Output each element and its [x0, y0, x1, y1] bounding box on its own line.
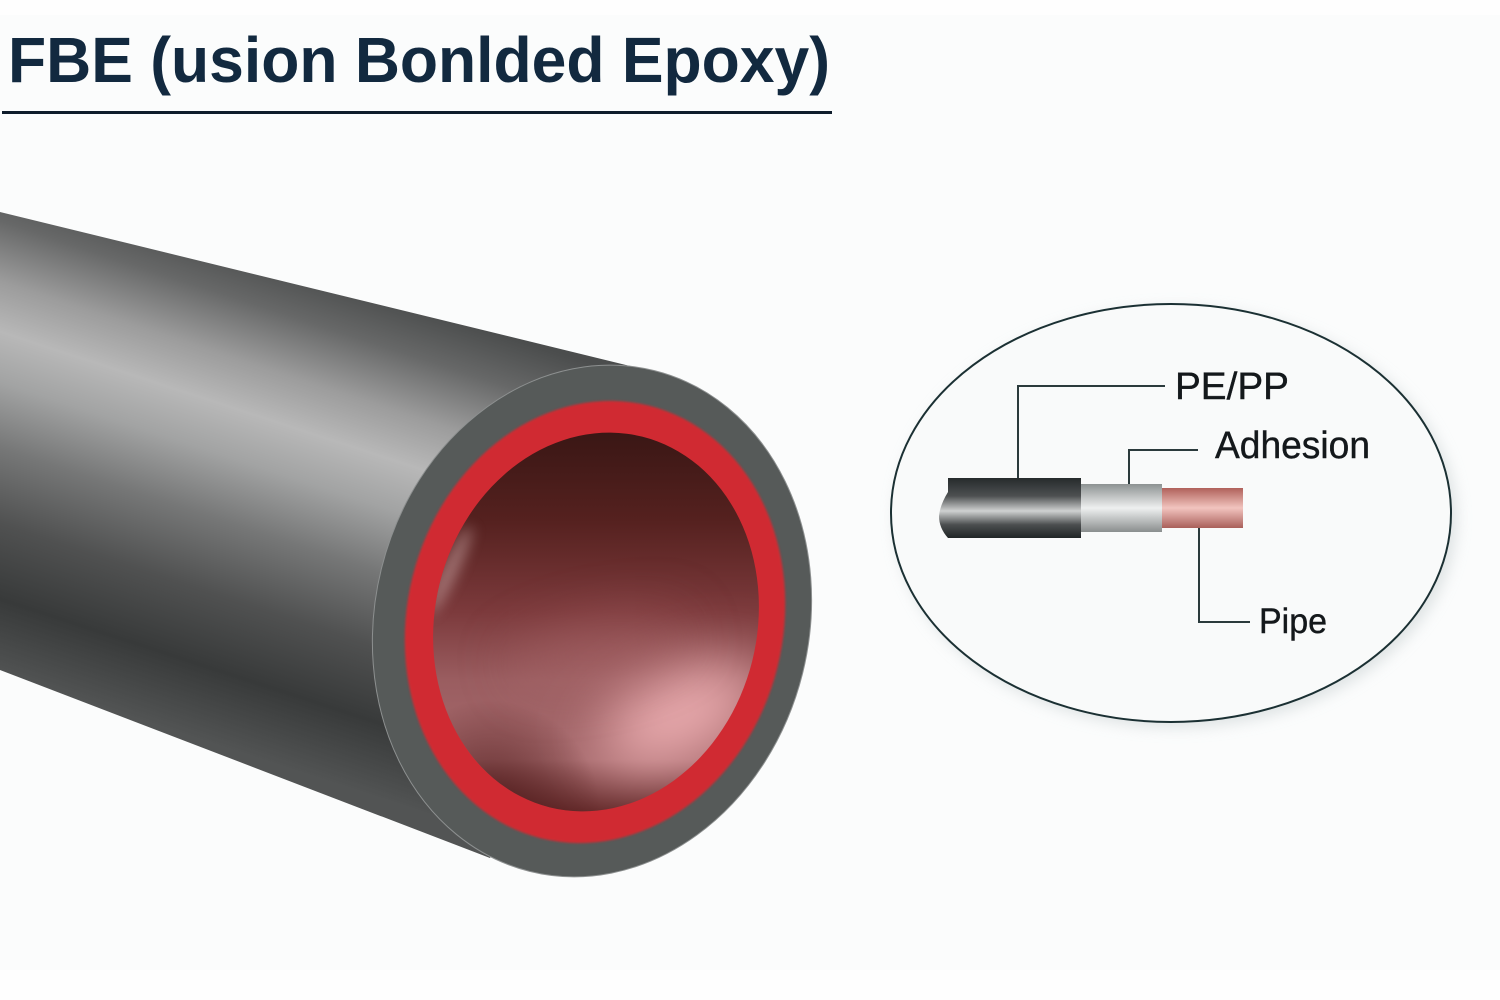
- red epoxy ring: [359, 360, 831, 884]
- cable: adhesion layer: [1081, 484, 1162, 532]
- label: PE/PP: PE/PP: [1175, 366, 1289, 408]
- pipe outer coating end face: [319, 318, 865, 924]
- pipe body: [0, 212, 630, 858]
- cable: pipe layer: [1162, 488, 1243, 528]
- pipe bore interior: [433, 432, 759, 812]
- inset circle: [891, 304, 1451, 722]
- inset: layer diagram: [891, 304, 1457, 728]
- cable: PE/PP layer: [939, 478, 1081, 538]
- leader line: PE/PP: [1018, 386, 1165, 478]
- inset shadow: [895, 308, 1457, 728]
- leader line: Pipe: [1199, 528, 1250, 622]
- title: FBE (usion Bonlded Epoxy): [8, 24, 830, 96]
- leader line: Adhesion: [1129, 450, 1198, 484]
- illustration: coated pipe cross-section: [0, 212, 812, 878]
- label: Adhesion: Adhesion: [1215, 425, 1370, 467]
- label: Pipe: Pipe: [1259, 602, 1327, 641]
